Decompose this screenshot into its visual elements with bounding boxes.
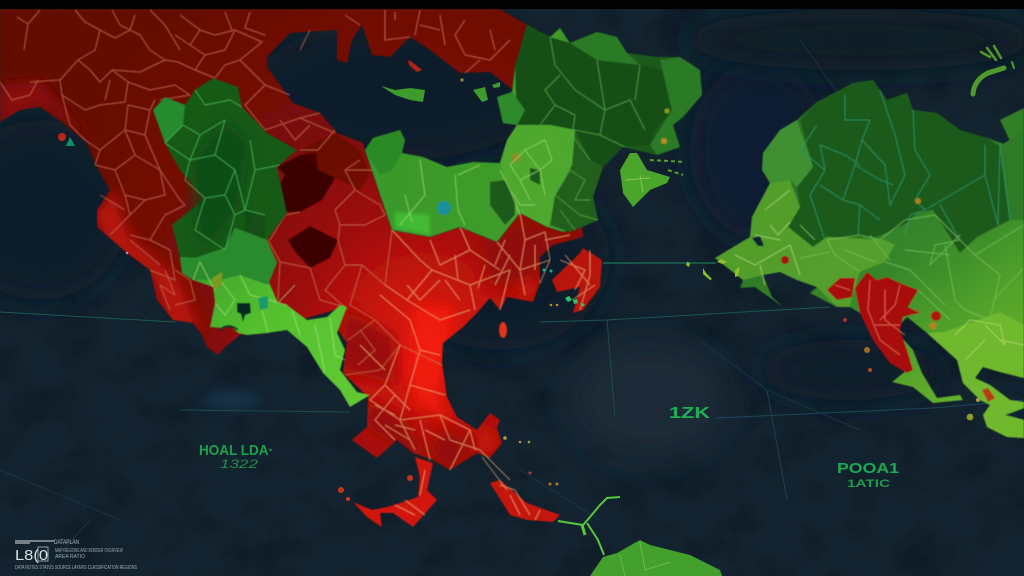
map label: east: 1ATIC (847, 478, 890, 490)
peninsula red southeast (490, 480, 560, 522)
isle red (499, 322, 507, 338)
dark maroon blobs (277, 153, 335, 212)
legend block: AREA RATIO (55, 554, 85, 560)
legend block (15, 540, 137, 571)
orange town (915, 198, 921, 204)
east peninsula (552, 248, 602, 313)
peninsula red south (353, 457, 437, 527)
paler north-west lobe (153, 97, 185, 143)
dark strip (490, 180, 515, 225)
clipped red shading (0, 80, 570, 470)
top-left coastal band (0, 80, 90, 140)
legend bar (15, 541, 54, 543)
darker south lobes (340, 310, 475, 470)
southern green land (558, 497, 722, 576)
island chain: north sea islands (381, 60, 500, 102)
map label: west: HOAL LDA· (199, 442, 273, 459)
mid forest edge (650, 57, 702, 155)
map: central green territory (365, 25, 702, 242)
north west lobe (365, 130, 405, 175)
eastern network lines (800, 90, 1010, 240)
light cells zone (500, 125, 575, 227)
far north-east islands (973, 46, 1014, 94)
legend mark: L8(0 (15, 547, 48, 564)
red enclaves (781, 256, 995, 402)
green network lines (165, 90, 280, 250)
central network lines (535, 37, 645, 230)
legend heading: DATAPLAN (54, 540, 79, 546)
map label: east (837, 460, 899, 490)
scattered islets (58, 133, 980, 501)
top black band (0, 0, 1024, 9)
dark water inlets (1000, 383, 1024, 420)
mid east (1000, 130, 1024, 220)
coast arc (220, 326, 238, 330)
light south-west (715, 180, 895, 307)
east island green (620, 153, 685, 207)
map: red territory (0, 9, 602, 527)
map: west green territory (153, 78, 370, 407)
dark lake (237, 303, 251, 322)
map label: east: POOA1 (837, 460, 899, 477)
brighter west coast (92, 190, 200, 330)
map label: centre: 1ZK (669, 405, 711, 422)
mid-green shoulder (180, 228, 277, 285)
green tail (558, 497, 620, 555)
south lime land (927, 312, 1024, 438)
northern dark forest (788, 80, 1010, 253)
orange towns (512, 154, 520, 162)
bright south edge (395, 212, 430, 235)
lower forest (550, 130, 603, 232)
darkest centre (190, 120, 250, 250)
central landmass (365, 25, 702, 242)
blue lake (437, 201, 451, 215)
dark green block (153, 78, 297, 290)
eastern landmass (715, 80, 1024, 438)
map: eastern green territory (715, 80, 1024, 438)
bright red core (408, 305, 455, 420)
pale north-west strip (762, 120, 813, 187)
map label: west (199, 442, 273, 471)
upper dark forest (515, 25, 672, 167)
red landmass (0, 9, 583, 470)
small yellow-green patch (212, 272, 222, 290)
legend footer: DATA NOTES STATUS SOURCE LAYERS CLASSIFICATION REGIONS (15, 565, 137, 571)
legend description: MAP REGIONS AND BORDER OVERVIEW (55, 548, 123, 554)
south green band (180, 228, 370, 407)
map label: west: 1322 (220, 457, 258, 471)
red network lines (0, 10, 510, 375)
darker north-band cells (480, 225, 570, 285)
